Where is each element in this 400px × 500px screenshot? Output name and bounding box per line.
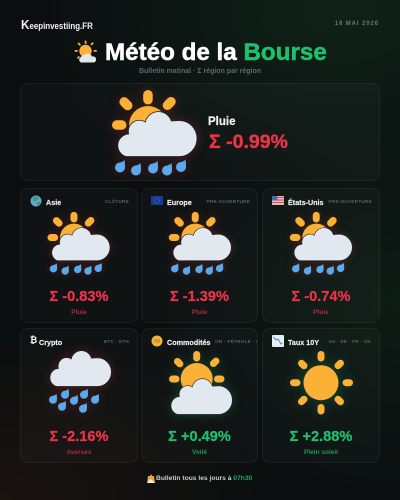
value: Σ -0.74%	[291, 289, 351, 305]
icon: sun behind cloud	[74, 40, 97, 62]
icon: chart down	[272, 335, 284, 347]
name: États-Unis	[288, 198, 324, 207]
tag: BTC · ETH	[104, 339, 129, 344]
panel: Taux 10Y	[262, 328, 380, 463]
panel: global summary	[20, 83, 380, 181]
panel: Europe	[141, 188, 258, 323]
tag: US · DE · FR · UK	[328, 339, 371, 344]
icon: gold coin	[152, 336, 162, 346]
value: Σ +0.49%	[168, 429, 231, 445]
condition: Pluie	[313, 309, 329, 316]
panel: Crypto	[20, 328, 138, 463]
tag: CLÔTURE	[105, 199, 129, 204]
tag: PRÉ-OUVERTURE	[207, 199, 250, 204]
name: Taux 10Y	[288, 338, 319, 347]
logo: Keepinvestiing.FR	[21, 17, 93, 32]
icon: EU flag	[151, 196, 163, 205]
subtitle: Bulletin matinal · Σ région par région	[139, 68, 261, 75]
footer	[147, 474, 252, 483]
condition: Voilé	[192, 449, 207, 456]
heading text: Météo de la Bourse	[105, 39, 327, 66]
panel: Asie	[20, 188, 138, 323]
condition: Plein soleil	[304, 449, 338, 456]
label: condition: Pluie	[208, 116, 235, 128]
name: Commodités	[167, 338, 211, 347]
footer text: Bulletin tous les jours à 07h30	[156, 475, 252, 482]
value: Σ -1.39%	[170, 289, 229, 305]
title	[74, 39, 327, 66]
name: Crypto	[39, 338, 62, 347]
value: Σ -2.16%	[49, 429, 109, 445]
icon: globe	[30, 196, 42, 206]
panel: Commodités	[141, 328, 258, 463]
value: Σ -0.83%	[49, 289, 109, 305]
icon: US flag	[272, 196, 284, 205]
name: Europe	[167, 198, 192, 207]
condition: Pluie	[71, 309, 87, 316]
icon: sunrise	[147, 474, 155, 483]
date: 18 MAI 2026	[335, 21, 379, 27]
value: Σ +2.88%	[290, 429, 352, 445]
icon: bitcoin: ₿	[30, 336, 37, 346]
value: Σ -0.99%	[209, 131, 288, 153]
panel: États-Unis	[262, 188, 380, 323]
condition: Averses	[66, 449, 92, 456]
name: Asie	[46, 198, 61, 207]
condition: Pluie	[192, 309, 207, 316]
tag: PRÉ-OUVERTURE	[329, 199, 372, 204]
